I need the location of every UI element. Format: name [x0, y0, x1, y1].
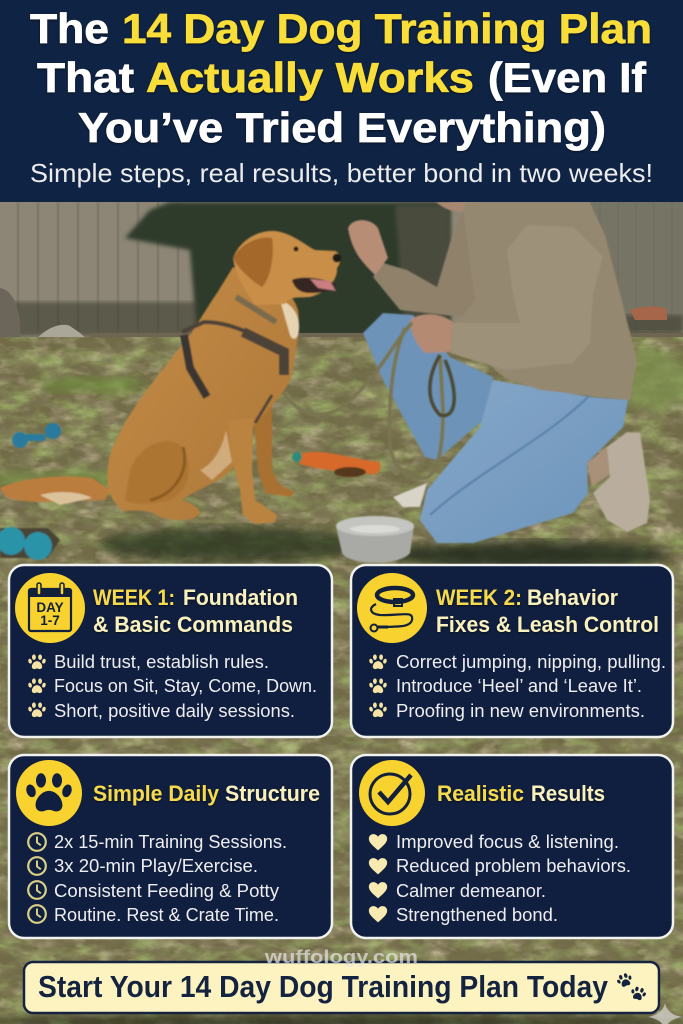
bullets: Consistent Feeding & Potty: [54, 881, 279, 901]
icon: check mark: [359, 760, 425, 826]
bullets: Short, positive daily sessions.: [54, 701, 295, 721]
panel: week 2: [351, 565, 673, 737]
bullets: Build trust, establish rules.: [54, 652, 269, 672]
icon: calendar day 1-7: 1-7: [40, 613, 60, 628]
bullets: [369, 652, 666, 721]
heading: Behavior: [527, 585, 618, 610]
bullets: Correct jumping, nipping, pulling.: [396, 652, 666, 672]
icon: paw prints: [615, 972, 648, 1001]
heading: [436, 585, 659, 637]
icon: paw: [16, 760, 82, 826]
bullets: 2x 15-min Training Sessions.: [54, 832, 287, 852]
toys on the grass: [0, 423, 381, 560]
sweater: pointing sleeve: [373, 210, 475, 317]
heading: [437, 781, 605, 806]
heading: Realistic: [437, 781, 524, 806]
icon: calendar day 1-7: [15, 573, 85, 643]
icon: collar and leash: [357, 573, 427, 643]
title: (Even If: [488, 54, 647, 101]
dog: golden retriever sitting: [0, 231, 342, 524]
title: That: [37, 54, 134, 101]
rear front leg: [253, 405, 295, 497]
bullets: Improved focus & listening.: [396, 832, 619, 852]
ground: grass and dirt: [0, 337, 683, 1024]
dog harness and collar: [182, 297, 285, 423]
jeans: [363, 313, 493, 460]
sparkle mark: [648, 1003, 682, 1024]
call to action button: Start Your 14 Day Dog Training Plan Today: [38, 969, 609, 1004]
heading: Foundation: [183, 585, 298, 610]
face edge: [436, 202, 482, 212]
water bowl: [336, 516, 414, 563]
main body: [107, 267, 299, 520]
heading: Fixes & Leash Control: [436, 612, 659, 637]
leash: [283, 323, 454, 478]
shoe: front: [393, 483, 427, 507]
title: You’ve Tried Everything): [78, 104, 606, 151]
bullets: 3x 20-min Play/Exercise.: [54, 856, 258, 876]
icon: calendar day 1-7: DAY: [36, 600, 64, 615]
bullets: [369, 832, 631, 925]
heading: Results: [531, 781, 605, 806]
bullets: Proofing in new environments.: [396, 701, 645, 721]
bullets: Routine. Rest & Crate Time.: [54, 905, 279, 925]
title: [30, 5, 652, 151]
toy: orange carrot: [292, 452, 381, 477]
bullets: Reduced problem behaviors.: [396, 856, 631, 876]
header banner: [0, 0, 683, 202]
toy: teal balls: [0, 527, 60, 560]
bullets: Calmer demeanor.: [396, 881, 546, 901]
shoe: rear and ankle: [587, 447, 615, 487]
title: Actually Works: [146, 54, 474, 101]
heading: Structure: [225, 781, 320, 806]
panel: week 1: [9, 565, 332, 737]
panel: simple daily structure: [9, 755, 332, 938]
bullets: [28, 832, 287, 925]
title: 14 Day Dog Training Plan: [122, 5, 652, 52]
call to action button: [24, 962, 659, 1013]
panel: realistic results: [351, 755, 673, 938]
sweater: near arm: [450, 225, 603, 370]
bullets: Strengthened bond.: [396, 905, 558, 925]
toy: blue dumbbell: [12, 423, 61, 448]
heading: WEEK 2:: [436, 585, 522, 610]
heading: WEEK 1:: [93, 585, 175, 610]
heading: & Basic Commands: [93, 612, 293, 637]
background: fence and foliage: [0, 202, 683, 342]
title: The: [30, 5, 109, 52]
hands: [348, 220, 388, 275]
sweater body: [440, 203, 637, 400]
heading: [93, 781, 320, 806]
bullets: Focus on Sit, Stay, Come, Down.: [54, 676, 317, 696]
heading: Simple Daily: [93, 781, 219, 806]
heading: [93, 585, 298, 637]
watermark: wuffology.com: [264, 947, 418, 967]
man: kneeling trainer: [348, 202, 650, 543]
bullets: Introduce ‘Heel’ and ‘Leave It’.: [396, 676, 642, 696]
bullets: [28, 652, 317, 721]
subtitle: Simple steps, real results, better bond in two weeks!: [30, 158, 653, 188]
near front leg: [228, 418, 277, 524]
